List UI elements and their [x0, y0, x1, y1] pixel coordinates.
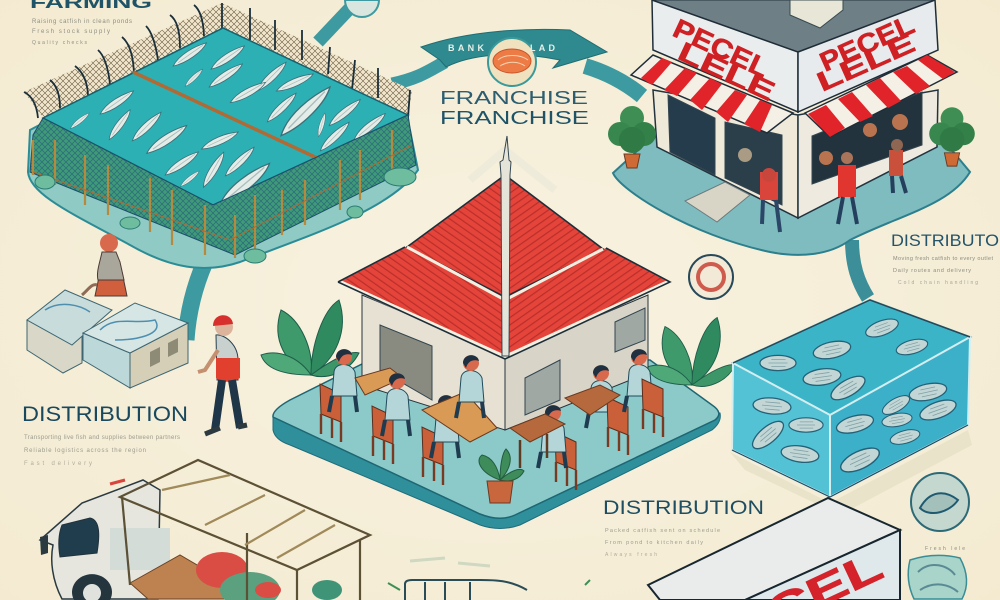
- icon: fish badge: [911, 473, 969, 531]
- sign right: [798, 0, 938, 112]
- sign text left: PECEL: [815, 9, 919, 77]
- right wall: [798, 90, 938, 218]
- heading: distribution center: Packed catfish sent on schedule: [605, 528, 720, 534]
- ground: [613, 130, 970, 255]
- connector arrows: [186, 6, 868, 340]
- heading: distributor right: DISTRIBUTO: [891, 231, 999, 250]
- panel: delivery truck left: [40, 460, 370, 600]
- panel: pecel lele restaurant: [608, 0, 975, 255]
- food in window: [738, 114, 908, 165]
- banner ribbon: LAD: [530, 43, 556, 53]
- sign left: [652, 0, 798, 112]
- heading: distributor right: Cold chain handling: [898, 280, 978, 286]
- sketch: small van outline: [388, 558, 590, 600]
- fish: [68, 42, 389, 207]
- front fence: [30, 115, 416, 258]
- tank right face: [830, 337, 970, 497]
- lower roof: [338, 247, 670, 359]
- heading: farming: [30, 0, 152, 46]
- heading: farming: Quality checks: [32, 40, 88, 46]
- heading: distribution left: Fast delivery: [24, 461, 92, 467]
- sign text left: [668, 9, 919, 107]
- heading: distribution left: Transporting live fish and supplies between partners: [24, 435, 180, 441]
- banner ribbon: BANK: [448, 43, 484, 53]
- shop windows: [668, 95, 715, 175]
- seated worker: [82, 234, 127, 296]
- tank top: [733, 300, 970, 415]
- sign text left: LELE: [673, 36, 779, 107]
- rooftop ac unit: [790, 0, 843, 28]
- icon: top circle badge: [345, 0, 379, 17]
- cab: [40, 480, 170, 600]
- wooden floor: [130, 555, 255, 599]
- pond divider: [133, 72, 317, 158]
- coolers: [27, 290, 188, 388]
- heading: distribution center: [603, 497, 764, 558]
- truck top: [648, 498, 900, 600]
- heading: distributor right: Moving fresh catfish to every outlet: [893, 256, 993, 262]
- truck side: [745, 530, 900, 600]
- water: [43, 28, 408, 205]
- tank fish: [748, 315, 959, 477]
- sign text left: PECEL: [668, 13, 774, 84]
- heading: distribution center: From pond to kitchen daily: [605, 540, 703, 546]
- frame: [120, 460, 370, 600]
- tank left face: [732, 363, 830, 497]
- diners: [320, 349, 663, 490]
- heading: distribution center: Always fresh: [605, 552, 657, 558]
- plant right: [647, 318, 735, 386]
- standing worker: [198, 315, 247, 434]
- potted plant: [479, 449, 524, 503]
- panel: delivery truck right: [648, 498, 900, 600]
- icon: fish jar: [908, 555, 967, 599]
- heading: distributor right: [891, 231, 999, 286]
- platform: [273, 360, 720, 528]
- doormat: [685, 182, 750, 222]
- heading: franchise: FRANCHISE: [440, 88, 588, 108]
- panel: fish tank: [730, 300, 972, 515]
- caption: small note: Fresh lele: [925, 546, 965, 552]
- plant left: [261, 300, 359, 377]
- heading: franchise: FRANCHISE: [440, 108, 589, 128]
- wall right: [505, 295, 648, 430]
- heading: distribution center: DISTRIBUTION: [603, 497, 764, 519]
- heading: distribution left: [22, 403, 188, 467]
- heading: distribution left: DISTRIBUTION: [22, 403, 188, 426]
- faint sketch: [470, 150, 555, 190]
- rooftop: [652, 0, 935, 52]
- customers: [760, 139, 906, 232]
- heading: distribution left: Reliable logistics across the region: [24, 448, 146, 454]
- heading: farming: Fresh stock supply: [32, 29, 110, 35]
- back fence: [24, 3, 412, 118]
- cargo: [196, 552, 342, 600]
- awning right: [805, 55, 957, 137]
- wall left: [362, 295, 505, 430]
- heading: distributor right: Daily routes and delivery: [893, 268, 971, 274]
- icon: round logo: [689, 255, 733, 299]
- awning left: [631, 55, 793, 133]
- upper roof: [407, 175, 603, 300]
- plants: [608, 106, 656, 168]
- panel: central pavilion: [261, 136, 735, 528]
- sign text left: LELE: [812, 28, 919, 97]
- left wall: [653, 90, 798, 218]
- panel: fish coolers and worker: [27, 234, 247, 434]
- panel: farming pond: [24, 3, 418, 268]
- bushes: [35, 168, 416, 263]
- pond ground base: [28, 30, 418, 268]
- door and windows: [380, 325, 432, 400]
- heading: farming: Raising catfish in clean ponds: [32, 19, 132, 25]
- banner ribbon: [421, 29, 607, 86]
- tank shadow: [730, 430, 972, 515]
- heading: franchise: [440, 88, 589, 128]
- spire: [500, 136, 511, 356]
